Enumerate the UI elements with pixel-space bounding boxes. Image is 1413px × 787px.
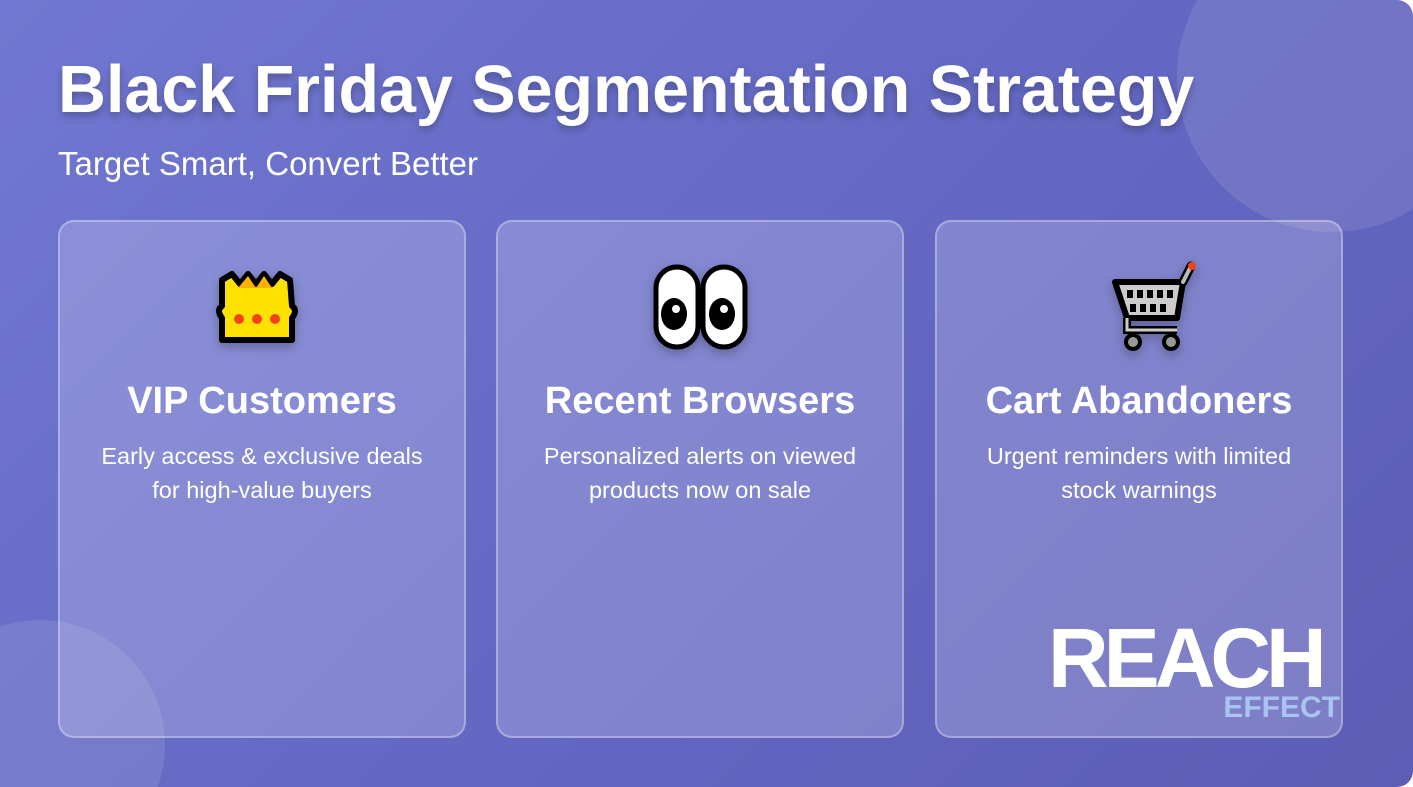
- panel: VIP customers: [58, 220, 466, 738]
- subtitle: Target Smart, Convert Better: [58, 145, 478, 182]
- text: cart description: stock warnings: [1061, 477, 1217, 503]
- text: browsers description: products now on sale: [589, 477, 811, 503]
- heading: VIP Customers: VIP Customers: [127, 380, 397, 422]
- text: VIP description: for high-value buyers: [152, 477, 372, 503]
- heading: Cart Abandoners: Cart Abandoners: [986, 380, 1292, 422]
- heading: Recent Browsers: Recent Browsers: [545, 380, 855, 422]
- panel: recent browsers: [496, 220, 904, 738]
- text: cart description: Urgent reminders with limited: [987, 443, 1291, 469]
- text: VIP description: [101, 443, 423, 503]
- text: cart description: [987, 443, 1291, 503]
- logo: Reach Effect: EFFECT: [1223, 691, 1340, 724]
- icon: crown: [212, 271, 302, 352]
- text: browsers description: [544, 443, 856, 503]
- text: VIP description: Early access & exclusive deals: [101, 443, 423, 469]
- title: Black Friday Segmentation Strategy: [58, 53, 1194, 127]
- text: browsers description: Personalized alerts on viewed: [544, 443, 856, 469]
- logo: Reach Effect: REACH: [1048, 612, 1322, 705]
- icon: shopping cart: [1109, 262, 1199, 358]
- panel: cart abandoners: [935, 220, 1343, 738]
- icon: eyes: [648, 264, 752, 358]
